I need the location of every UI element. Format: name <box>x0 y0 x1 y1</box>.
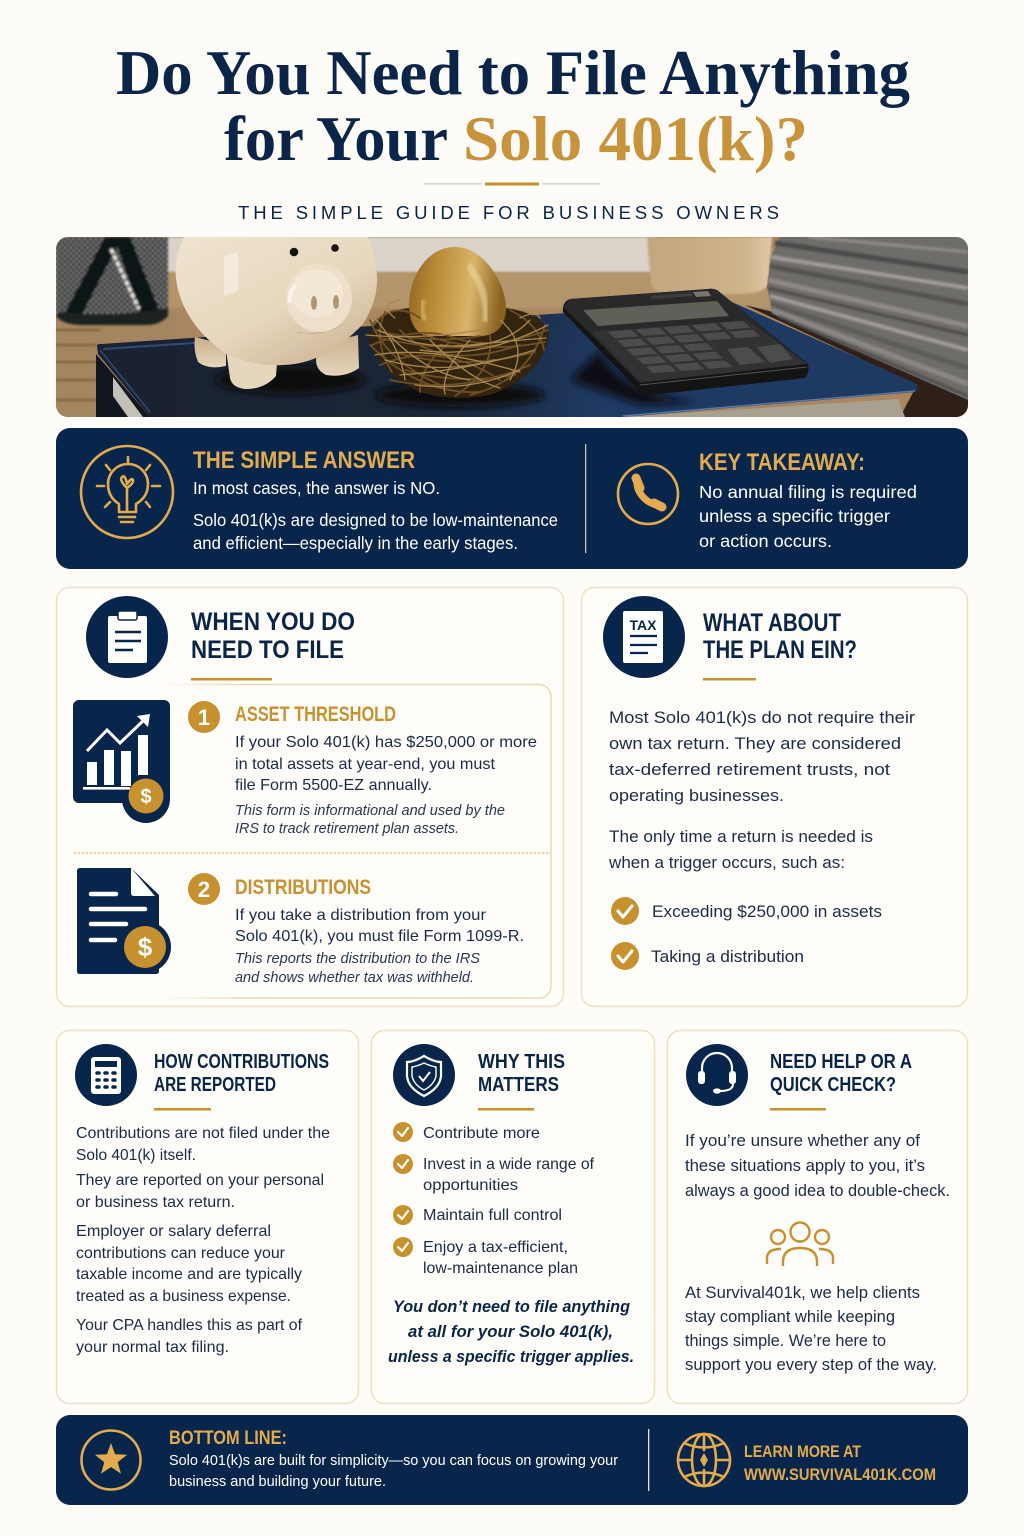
emphasis statement: You don’t need to file anything <box>393 1297 631 1316</box>
body text: contributions can reduce your <box>76 1245 286 1262</box>
item 2: distributions: If you take a distribution from your <box>235 907 487 924</box>
heading <box>191 608 355 680</box>
website link: WWW.SURVIVAL401K.COM <box>744 1466 936 1484</box>
title divider <box>424 182 600 186</box>
panel: when you do need to file <box>56 588 564 1006</box>
body text bottom: stay compliant while keeping <box>685 1307 895 1326</box>
heading: QUICK CHECK? <box>770 1074 896 1096</box>
emphasis statement: unless a specific trigger applies. <box>388 1347 634 1366</box>
heading <box>478 1051 565 1110</box>
item 1: asset threshold: IRS to track retirement plan assets. <box>235 821 459 837</box>
answer text <box>193 478 558 553</box>
heading <box>154 1051 329 1110</box>
bottom line text <box>169 1428 618 1490</box>
panel: bottom line banner <box>56 1415 968 1505</box>
title: Do You Need to File Anything <box>116 37 910 108</box>
website link <box>744 1443 936 1484</box>
icon: headset <box>686 1044 748 1106</box>
checklist: Maintain full control <box>423 1207 562 1224</box>
panel: why this matters <box>372 1030 654 1404</box>
takeaway text <box>699 482 917 551</box>
item 1: asset threshold <box>188 701 537 837</box>
heading: HOW CONTRIBUTIONS <box>154 1051 329 1073</box>
body text: operating businesses. <box>609 786 784 805</box>
body text top: If you’re unsure whether any of <box>685 1131 920 1150</box>
body text: The only time a return is needed is <box>609 827 873 846</box>
body text: They are reported on your personal <box>76 1172 324 1189</box>
checklist: Enjoy a tax-efficient, <box>423 1239 568 1256</box>
body text: tax-deferred retirement trusts, not <box>609 760 890 779</box>
body text bottom <box>685 1283 937 1374</box>
takeaway text: No annual filing is required <box>699 482 917 502</box>
hero photo: piggy bank, golden egg, calculator <box>56 237 968 417</box>
icon: light bulb <box>81 446 173 538</box>
item 1: asset threshold: ASSET THRESHOLD <box>235 703 396 726</box>
website link: LEARN MORE AT <box>744 1443 861 1461</box>
item 2: distributions <box>188 873 524 986</box>
icon: phone <box>618 464 678 524</box>
piggy bank <box>176 237 377 389</box>
body text: Most Solo 401(k)s do not require their <box>609 708 915 727</box>
checklist <box>393 1122 595 1277</box>
emphasis statement <box>388 1297 634 1366</box>
answer text: and efficient—especially in the early stages. <box>193 533 518 553</box>
icon: tax document: TAX <box>630 617 657 633</box>
pencil holder <box>56 237 168 325</box>
icon: star <box>82 1430 140 1490</box>
item 2: distributions: and shows whether tax was withheld. <box>235 970 474 986</box>
body text top <box>685 1131 950 1200</box>
title <box>116 37 910 174</box>
icon: growth chart <box>73 700 170 823</box>
body text: taxable income and are typically <box>76 1266 302 1283</box>
item 1: asset threshold: 1 <box>198 705 210 730</box>
body text: Contributions are not filed under the <box>76 1125 330 1142</box>
body text: Employer or salary deferral <box>76 1223 271 1240</box>
heading: WHAT ABOUT <box>703 609 841 637</box>
item 1: asset threshold: in total assets at year-end, you must <box>235 756 496 773</box>
item 1: asset threshold: This form is informational and used by the <box>235 803 505 819</box>
takeaway text: unless a specific trigger <box>699 506 890 526</box>
icon: clipboard <box>86 596 168 678</box>
body text <box>76 1125 330 1356</box>
panel: simple answer banner <box>56 428 968 569</box>
body text bottom: things simple. We’re here to <box>685 1331 886 1350</box>
body text <box>608 708 915 872</box>
body text bottom: support you every step of the way. <box>685 1355 937 1374</box>
calculator <box>563 289 809 395</box>
checklist: Taking a distribution <box>651 947 804 966</box>
answer text: Solo 401(k)s are designed to be low-maintenance <box>193 510 558 530</box>
body text: when a trigger occurs, such as: <box>608 853 845 872</box>
icon: document with dollar: $ <box>138 932 153 962</box>
item 2: distributions: DISTRIBUTIONS <box>235 876 371 899</box>
icon: shield <box>393 1044 455 1106</box>
body text top: these situations apply to you, it’s <box>685 1156 925 1175</box>
heading: WHY THIS <box>478 1051 565 1073</box>
panel: how contributions are reported <box>56 1030 358 1404</box>
answer heading: THE SIMPLE ANSWER <box>193 447 415 474</box>
heading: NEED TO FILE <box>191 636 344 664</box>
body text: treated as a business expense. <box>76 1288 291 1305</box>
checklist: low-maintenance plan <box>423 1260 578 1277</box>
heading <box>770 1051 912 1110</box>
takeaway heading: KEY TAKEAWAY: <box>699 449 865 476</box>
item 2: distributions: This reports the distribution to the IRS <box>235 951 480 967</box>
icon: tax document <box>603 596 685 678</box>
panel: need help <box>668 1030 968 1404</box>
bottom line text: business and building your future. <box>169 1473 386 1490</box>
subtitle: THE SIMPLE GUIDE FOR BUSINESS OWNERS <box>238 202 779 223</box>
paper stack <box>767 237 968 400</box>
panel: what about the plan EIN <box>582 588 968 1006</box>
icon: growth chart: $ <box>140 786 152 808</box>
item 2: distributions: 2 <box>198 877 210 902</box>
heading <box>703 609 857 680</box>
icon: people <box>767 1222 833 1266</box>
icon: document with dollar <box>77 868 171 974</box>
emphasis statement: at all for your Solo 401(k), <box>408 1322 613 1341</box>
checklist: Contribute more <box>423 1125 540 1142</box>
heading: THE PLAN EIN? <box>703 636 857 664</box>
notebook <box>96 302 918 417</box>
heading: NEED HELP OR A <box>770 1051 912 1073</box>
body text bottom: At Survival401k, we help clients <box>685 1283 920 1302</box>
body text: your normal tax filing. <box>76 1339 229 1356</box>
bottom line text: Solo 401(k)s are built for simplicity—so you can focus on growing your <box>169 1452 618 1469</box>
title: Solo 401(k)? <box>463 103 808 174</box>
body text top: always a good idea to double-check. <box>685 1181 950 1200</box>
checklist: opportunities <box>423 1177 518 1194</box>
icon: calculator <box>75 1044 137 1106</box>
bottom line text: BOTTOM LINE: <box>169 1428 287 1449</box>
heading: MATTERS <box>478 1074 559 1096</box>
item 2: distributions: Solo 401(k), you must file Form 1099-R. <box>235 928 524 945</box>
body text: Solo 401(k) itself. <box>76 1147 196 1164</box>
icon: globe <box>678 1434 730 1486</box>
golden egg in nest <box>366 247 549 398</box>
takeaway text: or action occurs. <box>699 531 832 551</box>
item 1: asset threshold: If your Solo 401(k) has $250,000 or more <box>235 734 537 751</box>
heading: WHEN YOU DO <box>191 608 355 636</box>
checklist: Invest in a wide range of <box>423 1156 595 1173</box>
item 1: asset threshold: file Form 5500-EZ annually. <box>235 777 432 794</box>
body text: Your CPA handles this as part of <box>76 1317 303 1334</box>
checklist: Exceeding $250,000 in assets <box>652 902 882 921</box>
heading: ARE REPORTED <box>154 1074 276 1096</box>
answer text: In most cases, the answer is NO. <box>193 478 440 498</box>
body text: own tax return. They are considered <box>609 734 901 753</box>
coffee cup <box>647 237 772 294</box>
body text: or business tax return. <box>76 1194 235 1211</box>
checklist <box>611 897 882 970</box>
title: for Your <box>224 103 448 174</box>
